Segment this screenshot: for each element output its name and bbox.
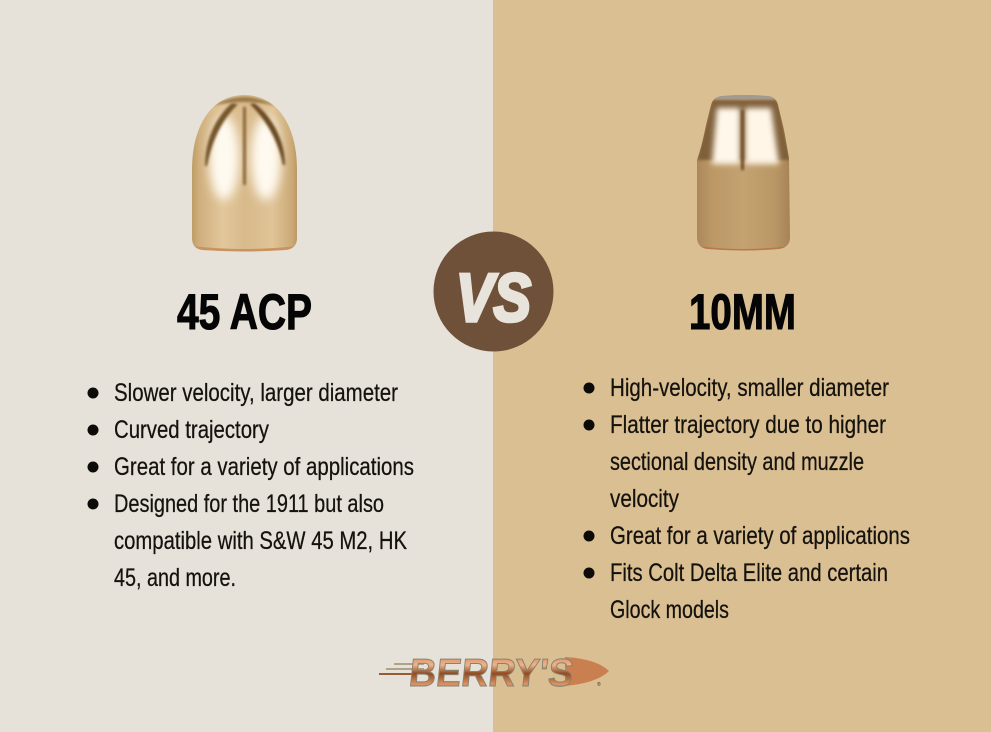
icon: 10mm flat-nose bullet <box>695 93 792 253</box>
list: 45 ACP points: Curved trajectory <box>114 416 269 444</box>
panel: 45 ACP background <box>0 0 493 732</box>
list: 10mm points: Great for a variety of applications <box>610 522 910 550</box>
list: 10mm points: sectional density and muzzle <box>610 448 864 476</box>
list: 10mm points <box>584 374 910 624</box>
list: 45 ACP points: compatible with S&W 45 M2, HK <box>114 527 407 555</box>
panel: 10mm background <box>493 0 991 732</box>
list: 10mm points: Fits Colt Delta Elite and certain <box>610 559 888 587</box>
list: 10mm points: High-velocity, smaller diameter <box>610 374 889 402</box>
list: 45 ACP points: Slower velocity, larger diameter <box>114 379 398 407</box>
heading: 10MM: 10MM <box>689 284 796 340</box>
heading: 45 ACP: 45 ACP <box>177 284 312 340</box>
list: 45 ACP points: 45, and more. <box>114 564 236 592</box>
badge: VS <box>434 232 554 352</box>
list: 10mm points: Glock models <box>610 596 729 624</box>
list: 10mm points: Flatter trajectory due to higher <box>610 411 886 439</box>
logo: Berry's: BERRY'S <box>407 652 576 695</box>
badge: VS: VS <box>456 260 531 336</box>
list: 45 ACP points <box>88 379 414 592</box>
logo: Berry's: ® <box>597 681 601 688</box>
icon: 45 ACP round-nose bullet <box>190 93 300 253</box>
list: 10mm points: velocity <box>610 485 679 513</box>
list: 45 ACP points: Designed for the 1911 but also <box>114 490 384 518</box>
list: 45 ACP points: Great for a variety of applications <box>114 453 414 481</box>
